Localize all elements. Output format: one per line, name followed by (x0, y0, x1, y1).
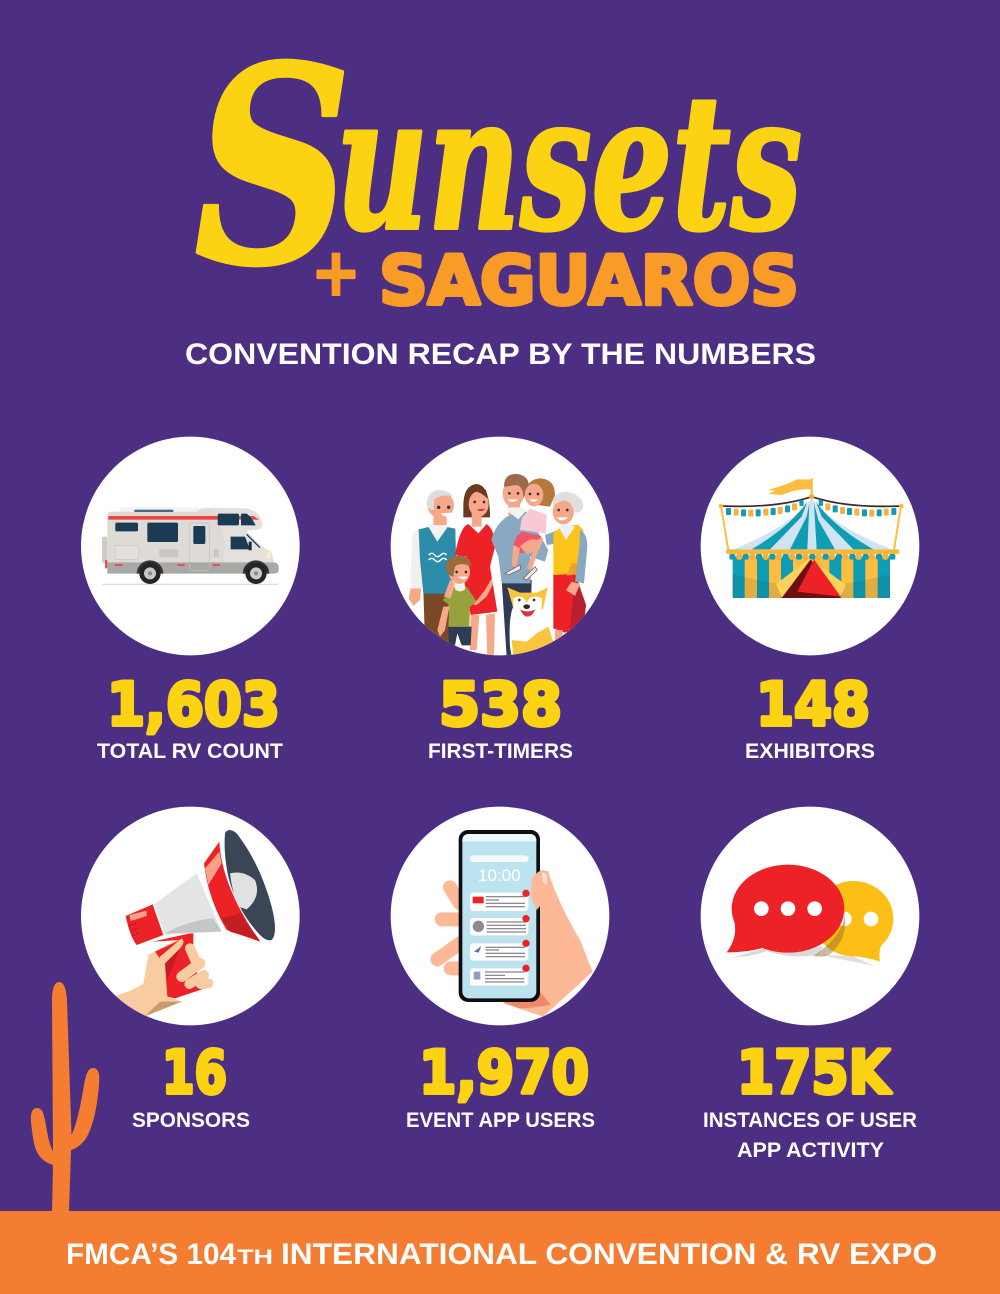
script word Sunsets (194, 8, 802, 327)
panel: instances of user app activity (701, 807, 919, 1162)
panel: total RV count (81, 437, 300, 763)
grandmother (545, 492, 587, 643)
footer text: INTERNATIONAL CONVENTION & RV EXPO (281, 1238, 937, 1271)
label: INSTANCES OF USER (703, 1109, 917, 1132)
label: TOTAL RV COUNT (97, 740, 283, 763)
word + Saguaros: SAGUAROS (379, 242, 799, 321)
number: 16 (162, 1038, 227, 1108)
word + Saguaros: + (311, 234, 361, 311)
label: EXHIBITORS (745, 740, 875, 763)
footer text: FMCA’S 104 (66, 1238, 236, 1271)
icon: family in white circle (391, 437, 609, 657)
icon: megaphone in white circle (81, 807, 300, 1025)
label: FIRST-TIMERS (428, 740, 573, 763)
number: 148 (756, 670, 870, 740)
icon: chat bubbles in white circle (701, 807, 919, 1025)
icon: circus tent in white circle (701, 437, 919, 655)
panel: exhibitors (701, 437, 919, 763)
number: 1,603 (107, 670, 280, 740)
panel: sponsors (81, 807, 300, 1132)
girl (505, 478, 555, 580)
panel: first-timers (391, 437, 609, 763)
script word Sunsets: unsets (336, 53, 802, 272)
title: Sunsets + Saguaros (194, 8, 802, 327)
footer text: TH (237, 1246, 273, 1269)
icon: smartphone in hand in white circle: 10:00 (478, 866, 521, 885)
footer band (0, 1211, 1000, 1294)
subtitle: CONVENTION RECAP BY THE NUMBERS (185, 338, 816, 371)
panel: event app users (391, 807, 609, 1132)
number: 538 (439, 670, 562, 740)
label line 2: APP ACTIVITY (737, 1139, 884, 1162)
number: 175K (737, 1038, 892, 1108)
icon: motorhome in white circle (81, 437, 300, 655)
father (491, 474, 548, 657)
saguaro cactus (31, 982, 99, 1212)
grandpa (409, 490, 456, 643)
mother (455, 484, 497, 657)
label: SPONSORS (132, 1109, 250, 1132)
script word Sunsets: S (194, 8, 352, 327)
number: 1,970 (419, 1038, 589, 1108)
boy (437, 555, 493, 645)
dog (507, 587, 554, 657)
icon: smartphone in hand in white circle (391, 807, 609, 1025)
label: EVENT APP USERS (406, 1109, 595, 1132)
